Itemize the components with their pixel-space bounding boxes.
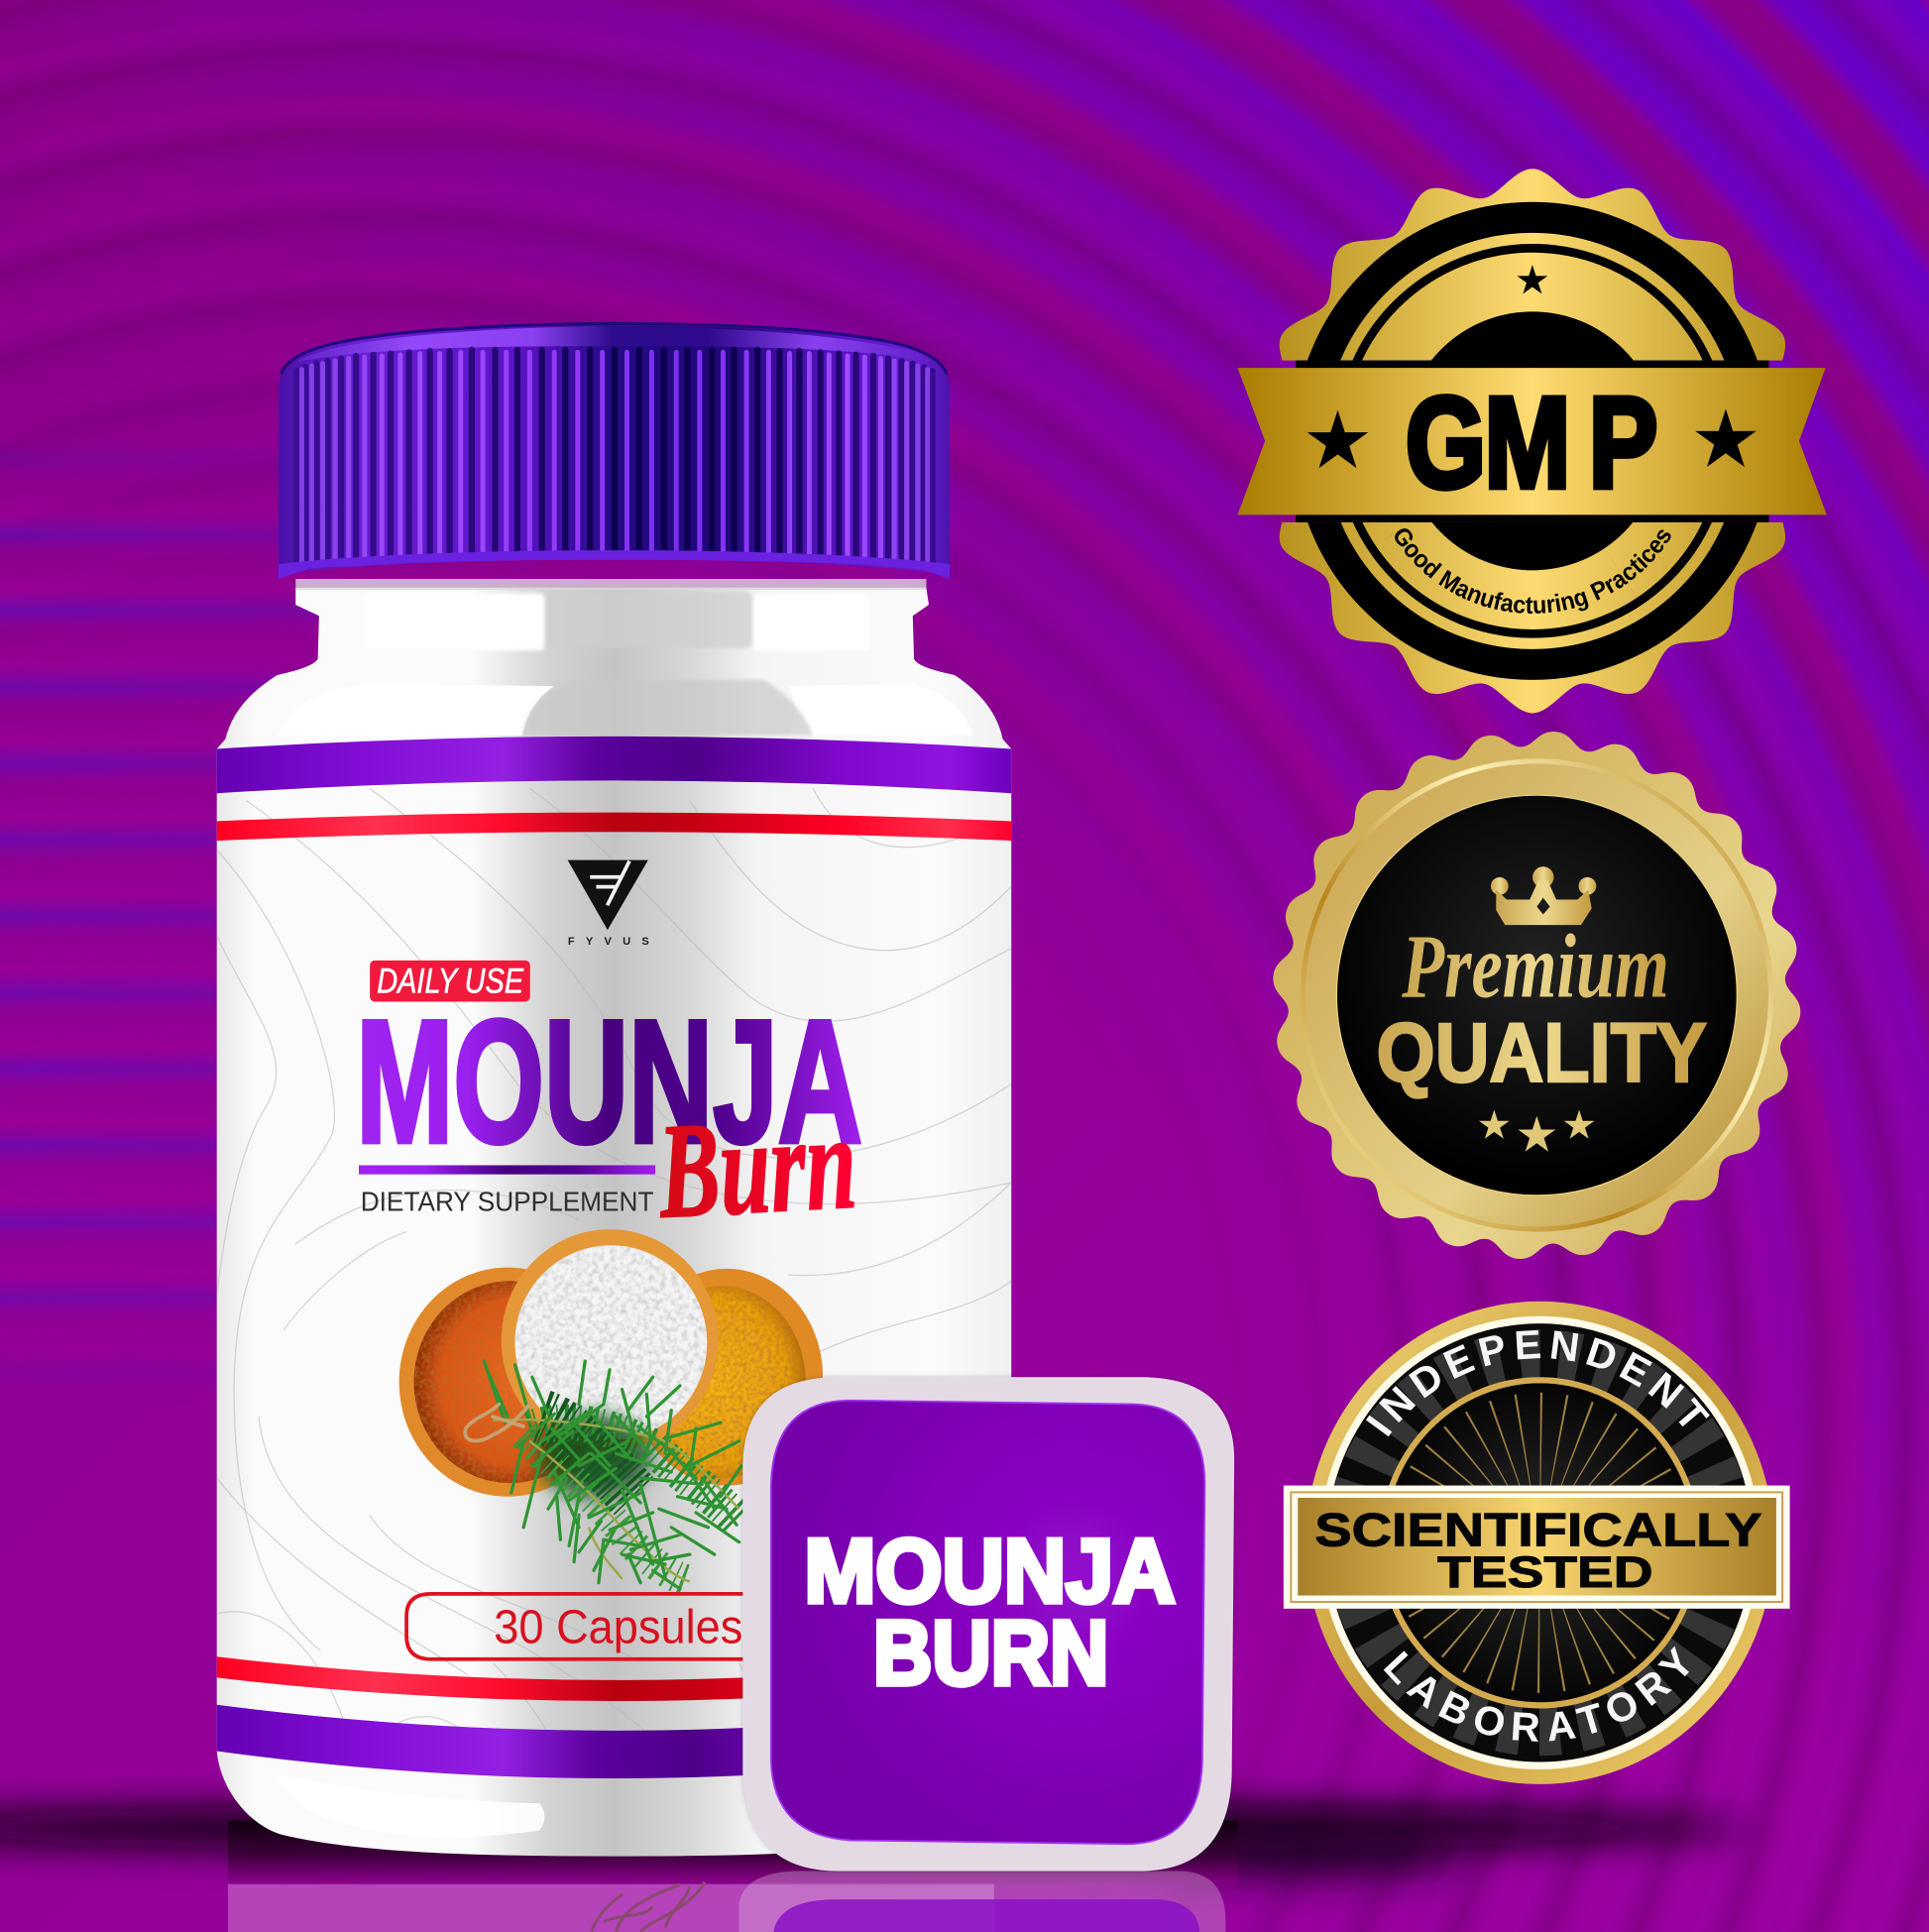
gold seal <box>1279 169 1786 714</box>
cap ribs <box>301 352 928 564</box>
top red band <box>217 813 1011 841</box>
ribbon white frame <box>1284 1486 1790 1609</box>
cap grooves <box>296 350 933 564</box>
three stars <box>1479 1110 1594 1152</box>
salt bowl <box>502 1229 718 1451</box>
band wedges <box>1355 1358 1725 1728</box>
product name: MOUNJA <box>356 984 862 1180</box>
rosemary sprig <box>465 1361 741 1589</box>
star left <box>1307 410 1368 468</box>
black disc <box>1336 795 1737 1195</box>
brand logo: FYVUS <box>568 936 649 948</box>
scientifically text: SCIENTIFICALLY <box>1314 1504 1761 1556</box>
bottle reflection on floor <box>228 1871 1225 1932</box>
gmp lettering: GMP <box>1406 371 1657 515</box>
lower purple band <box>217 1705 1011 1778</box>
top purple band <box>217 737 1011 793</box>
box purple face <box>771 1401 1204 1844</box>
bottle cap <box>279 323 950 579</box>
scalloped gold edge <box>1268 727 1805 1264</box>
ingredient bowls <box>399 1229 823 1497</box>
daily use tag: DAILY USE <box>377 964 524 1001</box>
box text burn: BURN <box>873 1603 1108 1704</box>
gold ribbon <box>1237 368 1827 514</box>
gold ring <box>1303 761 1770 1229</box>
white ring <box>1319 1316 1760 1769</box>
sunburst rays <box>1451 1454 1629 1632</box>
purple rule <box>359 1165 655 1175</box>
star top <box>1518 265 1547 293</box>
dietary supplement line: DIETARY SUPPLEMENT <box>361 1186 654 1216</box>
curved caption: Good Manufacturing Practices <box>1395 528 1671 615</box>
label contour pattern <box>217 788 1011 1773</box>
inner gold ring <box>1382 1380 1697 1705</box>
burn script: Burn <box>654 1085 859 1247</box>
badge: premium quality <box>1268 727 1805 1264</box>
base highlight <box>274 1773 544 1837</box>
star right <box>1695 409 1757 467</box>
dark band <box>1326 1323 1753 1762</box>
paprika bowl <box>399 1268 616 1497</box>
neck and shoulder highlights <box>278 579 973 736</box>
bottle body <box>217 588 1011 1857</box>
gold outer ring <box>1305 1302 1773 1784</box>
capsule count pill <box>406 1594 788 1659</box>
turmeric bowl <box>630 1269 823 1486</box>
tested text: TESTED <box>1437 1548 1653 1597</box>
crown icon <box>1491 866 1596 925</box>
floor shadow <box>0 1803 1750 1884</box>
box frame <box>742 1377 1234 1871</box>
ribbon gold line <box>1291 1492 1782 1602</box>
independent arc text: INDEPENDENT <box>1366 1330 1710 1437</box>
premium script: Premium <box>1401 915 1669 1016</box>
brand logo <box>568 860 649 948</box>
quality text: QUALITY <box>1377 1006 1707 1099</box>
capsule count pill: 30 Capsules <box>494 1601 742 1654</box>
mounja burn pill box <box>742 1377 1234 1871</box>
black strip behind ribbon <box>1296 361 1768 522</box>
badge: scientifically tested <box>1283 1301 1790 1784</box>
box text mounja: MOUNJA <box>804 1522 1175 1622</box>
badge: gmp <box>1237 169 1827 714</box>
ribbon gold panel <box>1298 1498 1776 1596</box>
lower red band <box>217 1656 1011 1701</box>
laboratory arc text: LABORATORY <box>1384 1646 1689 1742</box>
product bottle <box>217 323 1011 1857</box>
